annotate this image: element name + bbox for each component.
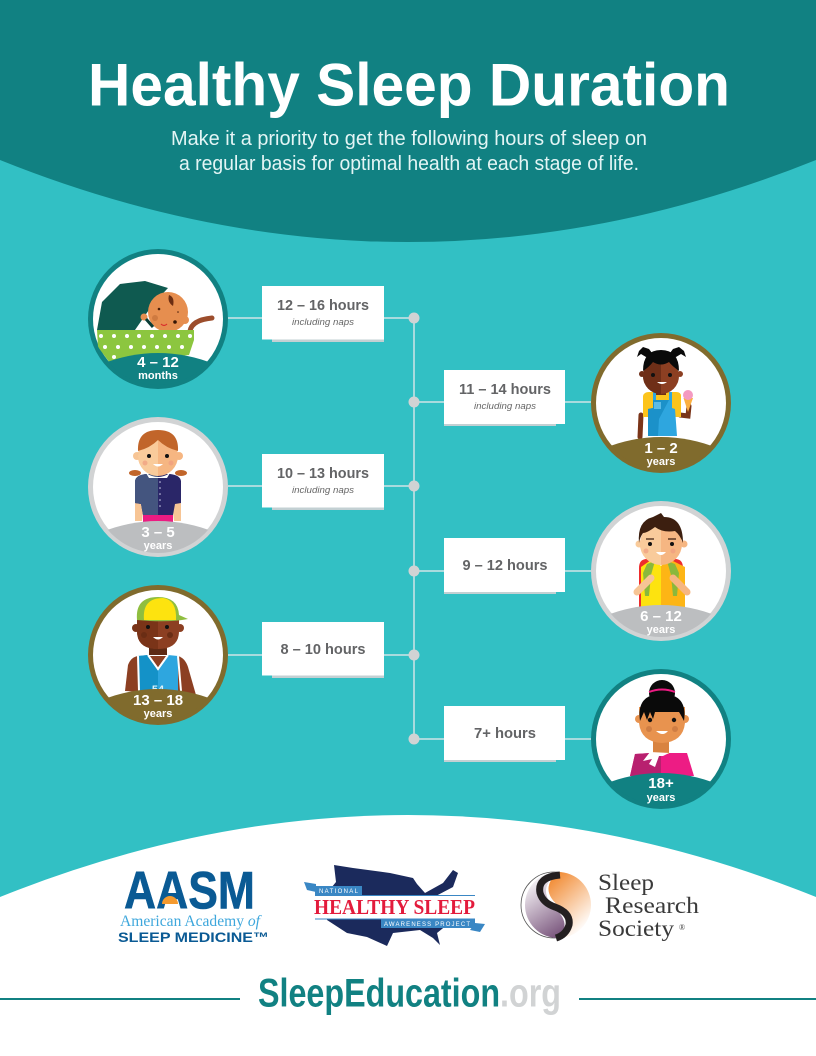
box: 10-13 hours bbox=[262, 454, 384, 510]
logo: AASM: AASM bbox=[124, 862, 255, 920]
title: Healthy Sleep Duration bbox=[88, 52, 730, 118]
badge: 18+ years adult bbox=[591, 669, 731, 809]
badge: 13-18 years teen bbox=[88, 585, 228, 725]
box: 9-12 hours: 9 – 12 hours bbox=[462, 558, 548, 574]
badge: 6-12 years boy bbox=[591, 501, 731, 641]
box: 8-10 hours bbox=[262, 622, 384, 678]
subtitle: Make it a priority to get the following hours of sleep on bbox=[171, 128, 647, 150]
box: 7+ hours: 7+ hours bbox=[474, 726, 536, 742]
logo: National Healthy Sleep Awareness Project: NATIONAL bbox=[319, 889, 359, 895]
logo: AASM: American Academy of bbox=[120, 913, 263, 930]
logo: Sleep Research Society: Society bbox=[598, 916, 675, 941]
website url: SleepEducation.org bbox=[258, 972, 561, 1016]
box: 11-14 hours: including naps bbox=[474, 401, 536, 412]
footer white band bbox=[0, 815, 816, 1056]
subtitle: a regular basis for optimal health at each stage of life. bbox=[179, 153, 639, 175]
badge: 4-12 months baby: months bbox=[138, 370, 178, 382]
badge: 18+ years adult: years bbox=[647, 792, 675, 804]
box: 12-16 hours: 12 – 16 hours bbox=[277, 298, 369, 314]
box: 11-14 hours: 11 – 14 hours bbox=[459, 382, 551, 398]
logo: Sleep Research Society: Research bbox=[605, 893, 700, 918]
logo: Sleep Research Society: Sleep bbox=[598, 870, 654, 895]
badge: 18+ years adult: 18+ bbox=[648, 775, 674, 792]
subtitle bbox=[171, 128, 647, 175]
box: 11-14 hours bbox=[444, 370, 565, 426]
timeline connectors bbox=[228, 318, 591, 739]
logo: Sleep Research Society bbox=[521, 870, 700, 941]
box: 7+ hours bbox=[444, 706, 565, 762]
badge: 4-12 months baby bbox=[88, 249, 228, 389]
logo: National Healthy Sleep Awareness Project: HEALTHY SLEEP bbox=[314, 895, 475, 919]
header band bbox=[0, 0, 816, 242]
box: 10-13 hours: 10 – 13 hours bbox=[277, 466, 369, 482]
box: 9-12 hours bbox=[444, 538, 565, 594]
box: 10-13 hours: including naps bbox=[292, 485, 354, 496]
badge: 6-12 years boy: 6 – 12 bbox=[640, 608, 682, 625]
badge: 3-5 years girl bbox=[88, 417, 228, 557]
logo: AASM bbox=[118, 862, 269, 945]
box: 12-16 hours: including naps bbox=[292, 317, 354, 328]
logo: AASM: SLEEP MEDICINE™ bbox=[118, 929, 269, 945]
badge: 3-5 years girl: years bbox=[144, 540, 172, 552]
badge: 13-18 years teen: 13 – 18 bbox=[133, 692, 183, 709]
timeline nodes bbox=[408, 312, 420, 744]
badge: 13-18 years teen: years bbox=[144, 708, 172, 720]
badge: 1-2 years toddler bbox=[591, 333, 731, 473]
badge: 13-18 years teen: 54 bbox=[152, 684, 165, 696]
logo: National Healthy Sleep Awareness Project: AWARENESS PROJECT bbox=[384, 922, 470, 928]
badge: 1-2 years toddler: years bbox=[647, 456, 675, 468]
logo: Sleep Research Society: ® bbox=[679, 923, 685, 932]
badge: 1-2 years toddler: 1 – 2 bbox=[644, 440, 678, 457]
badge: 4-12 months baby: 4 – 12 bbox=[137, 354, 179, 371]
badge: 6-12 years boy: years bbox=[647, 624, 675, 636]
box: 12-16 hours bbox=[262, 286, 384, 342]
box: 8-10 hours: 8 – 10 hours bbox=[280, 642, 366, 658]
website divider lines bbox=[0, 998, 816, 1000]
logo: National Healthy Sleep Awareness Project bbox=[304, 865, 485, 946]
badge: 3-5 years girl: 3 – 5 bbox=[141, 524, 175, 541]
